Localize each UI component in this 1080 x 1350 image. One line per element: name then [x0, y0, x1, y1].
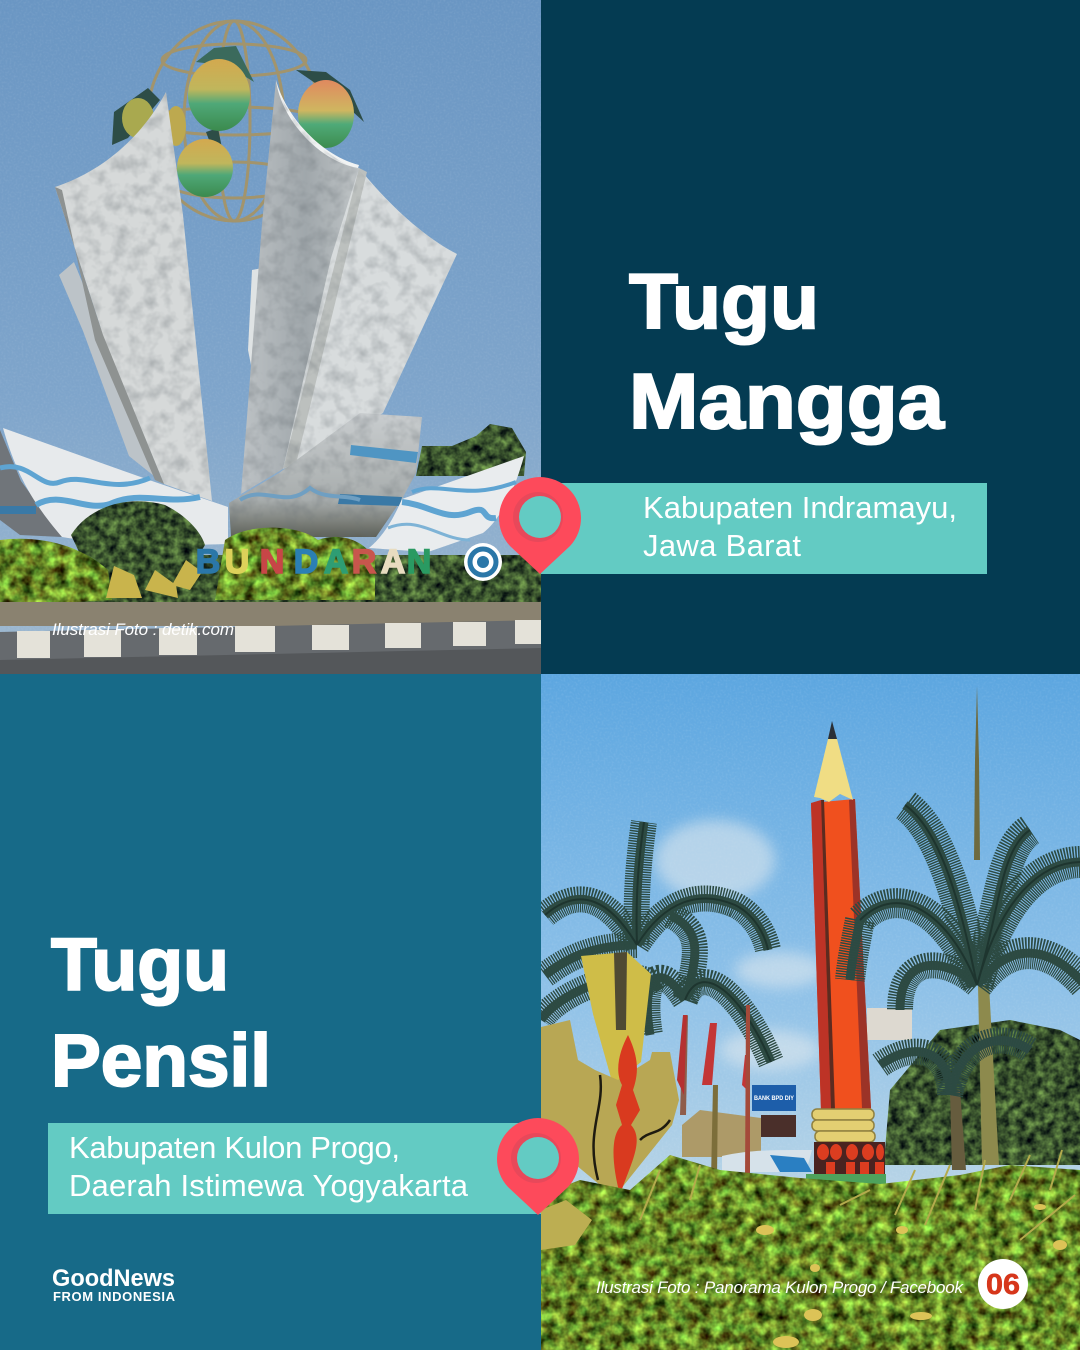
kerb and road [0, 620, 541, 660]
canopy [722, 1150, 812, 1172]
clouds [655, 820, 825, 1070]
dark sign [761, 1115, 796, 1137]
trunk second [950, 1090, 966, 1170]
page number badge [978, 1259, 1028, 1309]
blue sign [752, 1085, 796, 1111]
spike [974, 686, 980, 860]
photo credit: Ilustrasi Foto : detik.com [52, 620, 234, 639]
heading: Tugu Pensil: Tugu [51, 923, 229, 1006]
photo: Tugu Mangga monument [0, 0, 541, 674]
heading: Tugu Pensil: Pensil [51, 1019, 271, 1102]
sign: BUNDARAN: A [324, 543, 348, 581]
mangoes [122, 59, 354, 197]
foreground shrubs [541, 1155, 1080, 1350]
tree behind the monument [416, 424, 526, 476]
location banner: Indramayu: Jawa Barat [643, 528, 801, 563]
bird base [541, 1020, 679, 1190]
distant trees [885, 1020, 1080, 1165]
photo: Tugu Pensil monument [541, 674, 1080, 1350]
mango leaves [112, 46, 364, 145]
tan patch beside pin [541, 1200, 592, 1250]
wall [0, 602, 541, 626]
left blade [55, 92, 212, 501]
sign: BUNDARAN: N [407, 543, 431, 581]
pencil left facet [811, 800, 831, 1111]
green plinth [806, 1174, 886, 1184]
sign: BUNDARAN: R [352, 543, 376, 581]
location banner: Indramayu: Kabupaten Indramayu, [643, 490, 957, 525]
right white blade [283, 168, 457, 469]
sign: BUNDARAN: N [260, 543, 284, 581]
pencil wood tip [814, 739, 853, 802]
logo: GoodNews from Indonesia [52, 1265, 176, 1304]
location banner: Kulon Progo: Kabupaten Kulon Progo, [69, 1130, 400, 1165]
grass blades [640, 1150, 1075, 1240]
photo credit: Ilustrasi Foto : Panorama Kulon Progo / Facebook [596, 1278, 964, 1297]
flags [677, 1005, 750, 1180]
sign: BUNDARAN: U [225, 543, 249, 581]
photo: Tugu Pensil monument: BANK BPD DIY [754, 1096, 794, 1102]
panel: Tugu Pensil background [0, 674, 541, 1350]
back centre strip [248, 268, 258, 364]
heading: Tugu Mangga: Tugu [629, 257, 819, 345]
roundabout sign [464, 543, 502, 581]
pencil body [811, 799, 871, 1111]
location banner: Kulon Progo: Daerah Istimewa Yogyakarta [69, 1168, 469, 1203]
location banner: Kulon Progo [48, 1123, 541, 1214]
centre box [229, 413, 422, 537]
left bowl [3, 428, 228, 545]
left palms [541, 822, 771, 1062]
yellow flowers [106, 560, 202, 598]
logo: GoodNews from Indonesia: FROM INDONESIA [53, 1289, 176, 1304]
red flame [614, 1035, 640, 1195]
right palms [850, 805, 1080, 1170]
panel: Tugu Mangga background [541, 0, 1080, 674]
yellow base [812, 1109, 875, 1142]
pencil lead [828, 721, 837, 739]
right bowl [369, 456, 524, 552]
red flower base [814, 1142, 885, 1174]
icon: map pin bottom [497, 1118, 579, 1215]
location banner: Indramayu [541, 483, 987, 574]
heading: Tugu Pensil [51, 923, 271, 1102]
sign: BUNDARAN: D [294, 543, 318, 581]
yellow sculpture [541, 952, 679, 1195]
pencil right facet [849, 799, 871, 1108]
back left blade [59, 262, 164, 484]
yellow fin [581, 952, 651, 1085]
left bowl shadow [0, 430, 62, 537]
stone texture [55, 84, 457, 537]
dark palm bush [71, 501, 205, 555]
foliage ground [75, 555, 541, 602]
icon: map pin top [499, 477, 581, 574]
sign: BUNDARAN [197, 548, 430, 574]
trunk main [978, 985, 999, 1165]
logo: GoodNews from Indonesia: GoodNews [52, 1265, 175, 1292]
pencil monument [806, 721, 886, 1184]
yellow blossoms [756, 1204, 1067, 1348]
grey centre blade [241, 80, 359, 494]
page number badge: 06 [986, 1269, 1020, 1301]
heading: Tugu Mangga: Mangga [629, 357, 945, 445]
wire globe [147, 21, 321, 221]
sign: BUNDARAN: A [381, 543, 405, 581]
building [682, 1110, 761, 1157]
heading: Tugu Mangga [629, 257, 945, 445]
box stripes [350, 445, 418, 463]
hedge [0, 539, 112, 606]
sign: BUNDARAN: B [196, 543, 220, 581]
billboard [867, 1008, 912, 1040]
outline curves [594, 1075, 670, 1180]
